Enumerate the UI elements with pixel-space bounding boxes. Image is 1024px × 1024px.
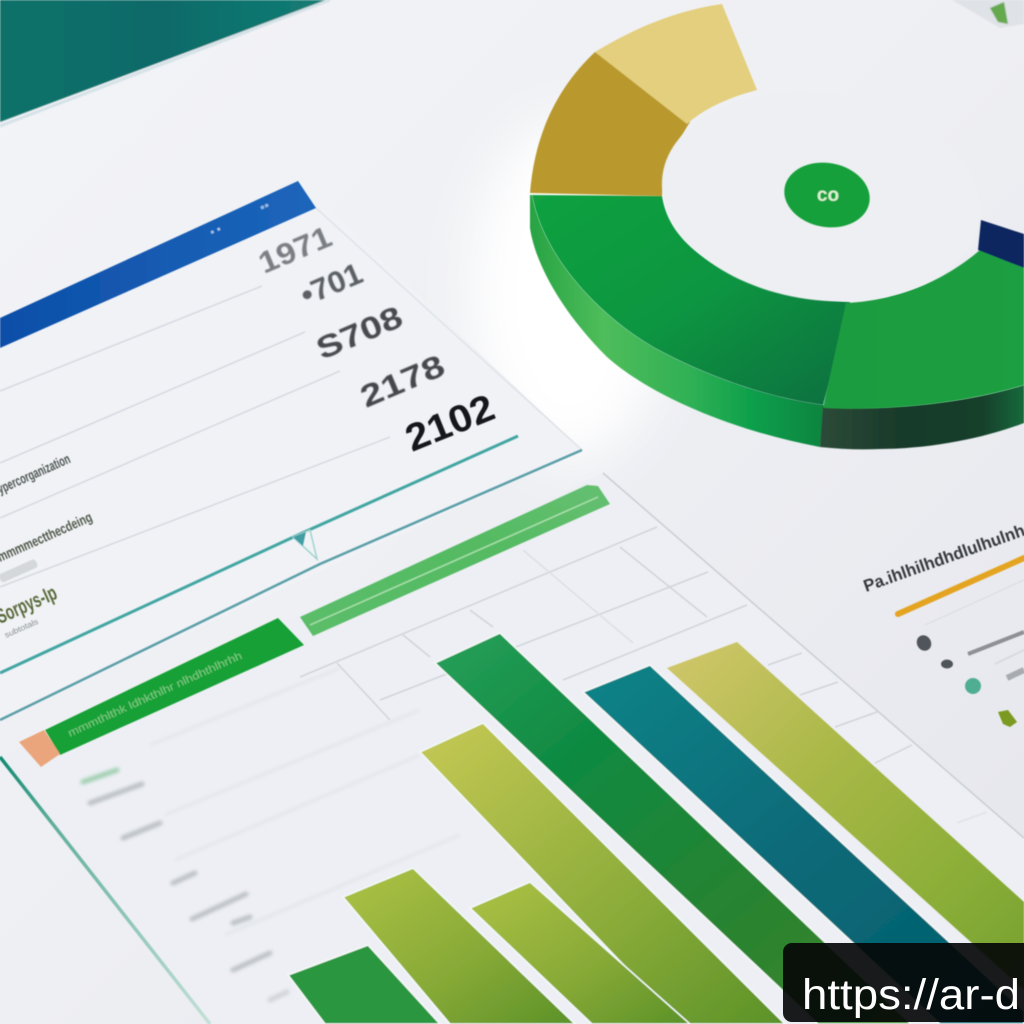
- panel: data table sheet: [0, 181, 582, 720]
- bar: olive short right: [470, 882, 690, 1024]
- URL watermark: [783, 943, 1024, 1022]
- table row lines: [0, 208, 582, 587]
- teal divider lines with marker: [0, 436, 582, 720]
- chart grid lines: [300, 473, 1024, 838]
- green header bar: [19, 618, 304, 767]
- donut centre hole: [648, 73, 994, 321]
- table values column: 1971: [254, 220, 337, 280]
- bar: olive short left: [343, 868, 575, 1024]
- row labels: subtotals: [3, 617, 40, 640]
- faint axis labels: [83, 770, 287, 1000]
- bar: olive middle: [420, 723, 785, 1024]
- centre badge: co: [817, 185, 839, 206]
- table values column: •701: [296, 257, 368, 312]
- orange bar tip: [19, 730, 60, 767]
- faint row lines: [150, 668, 460, 935]
- teal corner panel: [0, 0, 330, 126]
- blue table header: ▪ ▪: [208, 223, 223, 239]
- bar: green short: [288, 945, 440, 1024]
- bar: dark green: [435, 633, 911, 1024]
- donut segments: [530, 4, 1024, 409]
- legend rows: [914, 580, 1024, 727]
- donut side wall: [530, 195, 1024, 449]
- table values column: [254, 220, 450, 414]
- blue table header: [0, 181, 316, 348]
- orange rule: [898, 558, 1024, 614]
- panel: bar chart sheet: [0, 473, 1024, 1024]
- chart left edge: [0, 757, 210, 1024]
- bar chart bars: [288, 633, 1024, 1024]
- panel: donut chart: [530, 4, 1024, 449]
- highlighted total value: 2102: [400, 387, 501, 460]
- blue table header: ▪▪: [257, 197, 272, 215]
- centre badge: [779, 156, 875, 234]
- bar: olive right: [667, 642, 1024, 990]
- URL watermark: https://ar-d: [802, 971, 1020, 1019]
- soft glow beside donut: [470, 120, 670, 460]
- table values column: S708: [311, 299, 408, 366]
- table values column: 2178: [355, 348, 450, 414]
- panel: right legend: [861, 521, 1024, 727]
- bar: teal: [583, 665, 1024, 1024]
- light green header bar: [300, 485, 610, 636]
- header bar label: mmmthlthk ldhkthlhr nlhdhthlhrhh: [66, 650, 244, 740]
- row labels: [0, 450, 94, 640]
- top-right corner fragment: [952, 0, 1024, 28]
